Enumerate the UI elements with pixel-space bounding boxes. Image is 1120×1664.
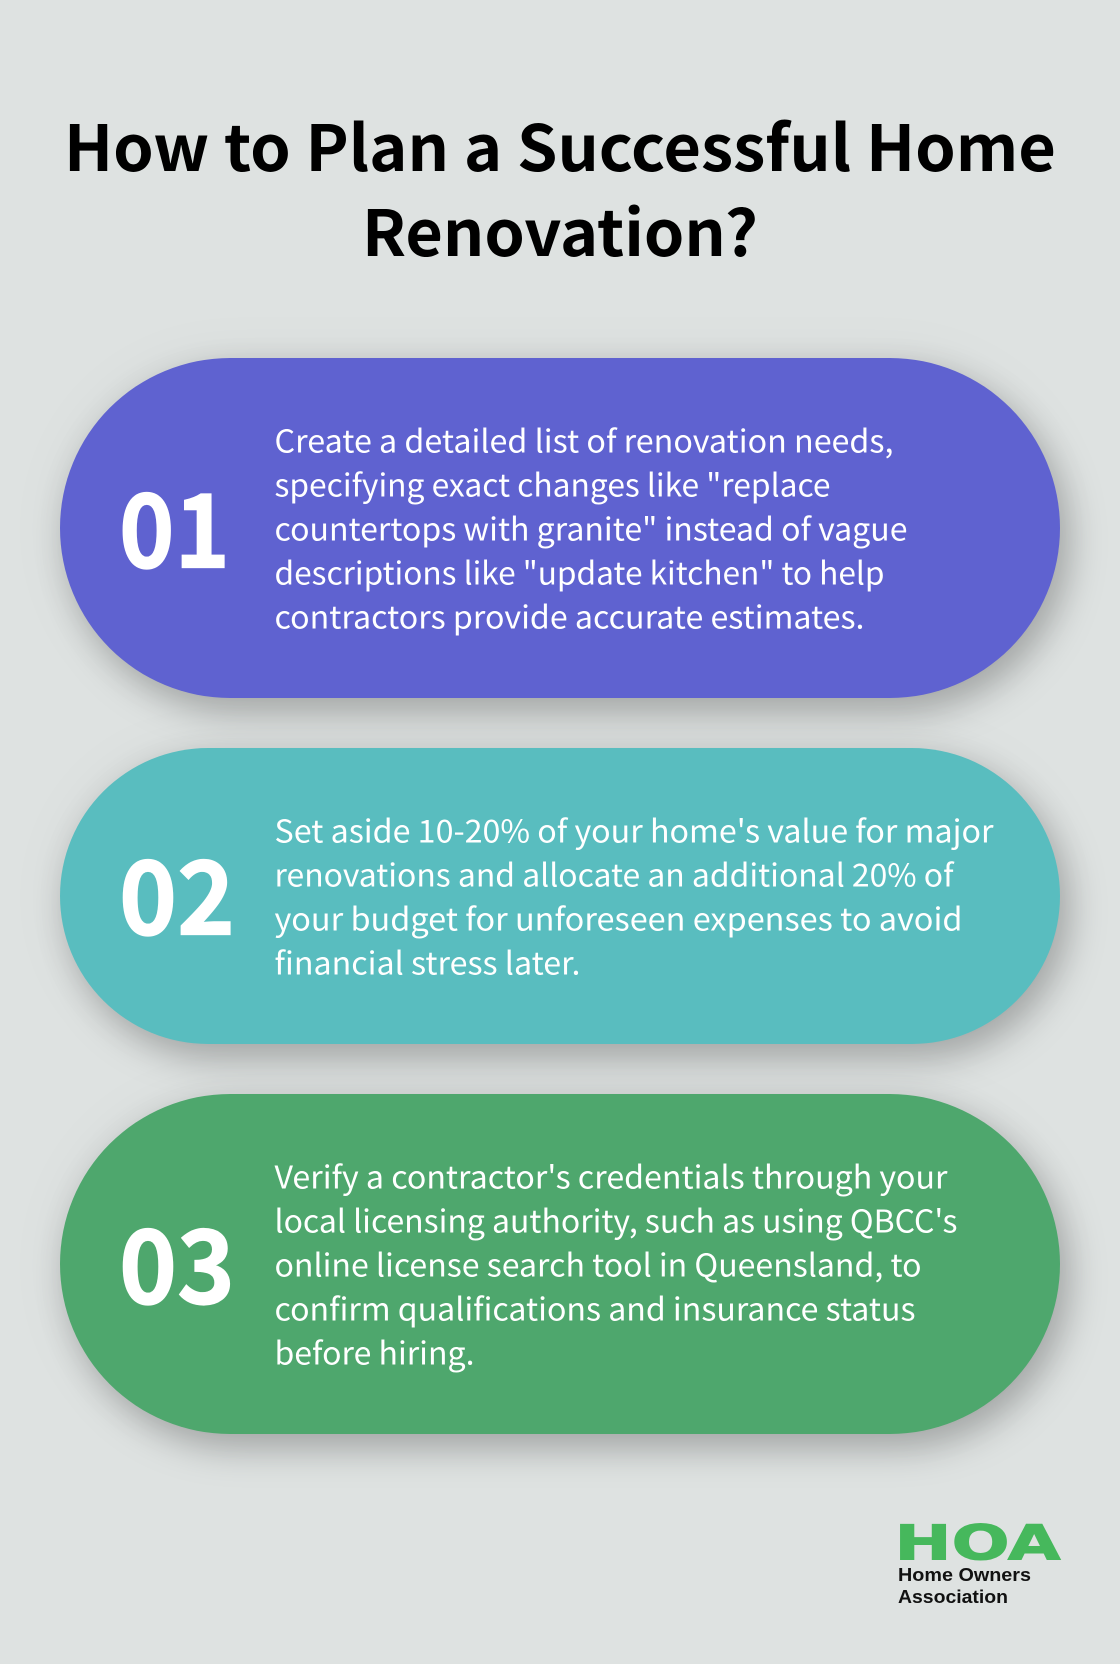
- logo: HOA Home Owners Association: Home Owners: [898, 1565, 1031, 1585]
- title: How to Plan a Successful Home: [64, 98, 1056, 190]
- text block 01: specifying exact changes like "replace: [274, 461, 830, 507]
- text block 03: before hiring.: [274, 1329, 474, 1375]
- text block 03: confirm qualifications and insurance status: [274, 1285, 916, 1331]
- logo: HOA Home Owners Association: Association: [898, 1587, 1008, 1607]
- panel: step 03: [60, 1094, 1060, 1434]
- panel: step 01: [60, 358, 1060, 698]
- pill background 03: [60, 1094, 1060, 1434]
- text block 01: countertops with granite" instead of vague: [274, 505, 908, 551]
- text block 03: local licensing authority, such as using QBCC's: [274, 1197, 957, 1243]
- number 02: 02: [119, 818, 235, 964]
- text block 02: renovations and allocate an additional 20% of: [274, 851, 955, 897]
- text block 03: [274, 1153, 957, 1375]
- text block 03: Verify a contractor's credentials through your: [274, 1153, 948, 1199]
- text block 01: descriptions like "update kitchen" to help: [274, 549, 884, 595]
- logo: HOA Home Owners Association: HOA: [894, 1516, 1060, 1572]
- title: Renovation?: [362, 183, 758, 275]
- number 03: 03: [119, 1186, 235, 1334]
- text block 02: Set aside 10-20% of your home's value for major: [274, 807, 994, 853]
- text block 03: online license search tool in Queensland, to: [274, 1241, 922, 1287]
- title: [64, 98, 1056, 275]
- logo: HOA Home Owners Association: [894, 1516, 1060, 1607]
- pill background 01: [60, 358, 1060, 698]
- text block 01: contractors provide accurate estimates.: [274, 593, 864, 639]
- panel: step 02: [60, 748, 1060, 1044]
- text block 02: your budget for unforeseen expenses to avoid: [274, 895, 962, 941]
- text block 02: [274, 807, 994, 985]
- text block 01: Create a detailed list of renovation needs,: [274, 417, 894, 463]
- number 01: 01: [119, 450, 230, 598]
- pill background 02: [60, 748, 1060, 1044]
- text block 01: [274, 417, 908, 639]
- text block 02: financial stress later.: [274, 939, 580, 985]
